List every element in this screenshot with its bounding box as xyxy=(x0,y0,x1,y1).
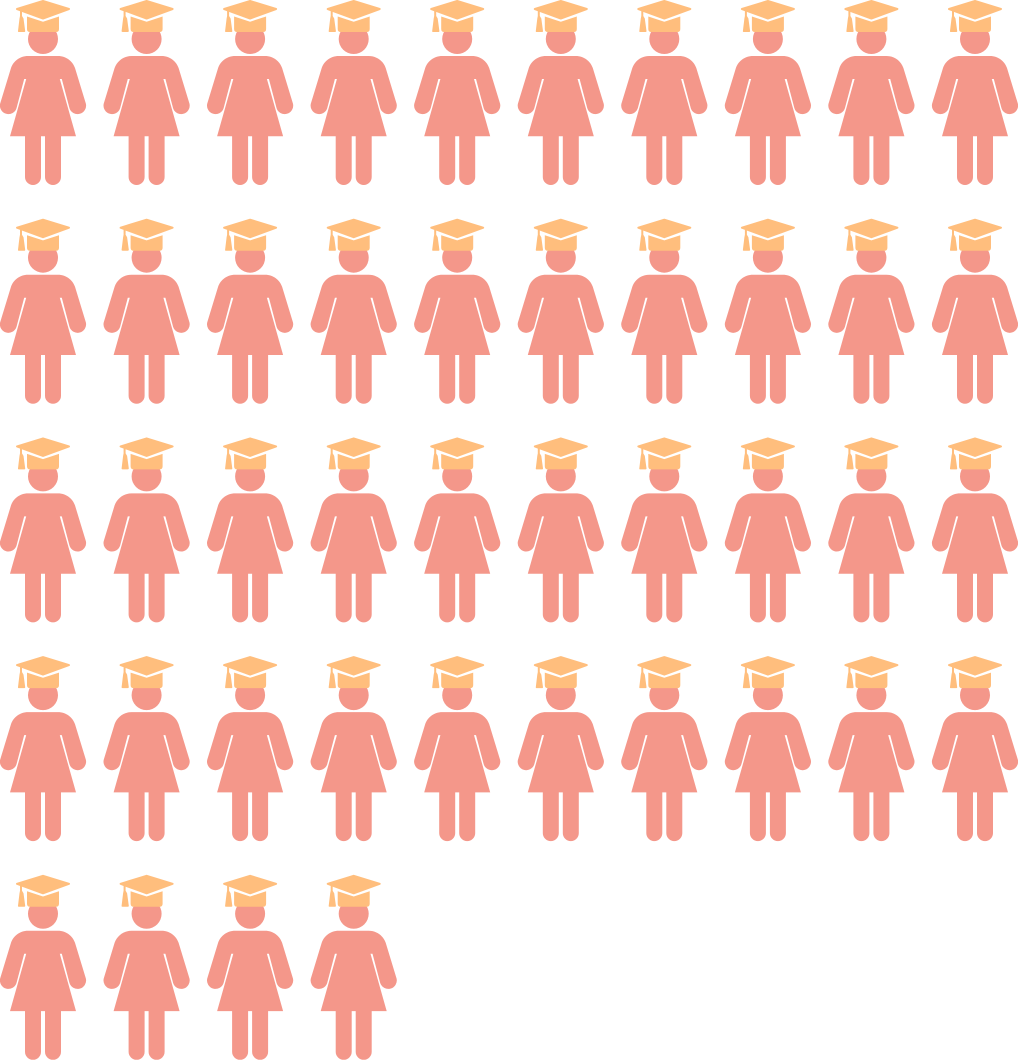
figure 42 xyxy=(104,876,190,1060)
figure 24 xyxy=(311,438,397,622)
figure 10 xyxy=(932,1,1018,185)
figure 25 xyxy=(414,438,500,622)
figure 6 xyxy=(518,1,604,185)
figure 11 xyxy=(0,220,86,404)
figure 22 xyxy=(104,438,190,622)
figure 15 xyxy=(414,220,500,404)
figure 1 xyxy=(0,1,86,185)
figure 31 xyxy=(0,657,86,841)
figure 16 xyxy=(518,220,604,404)
figure 14 xyxy=(311,220,397,404)
figure 37 xyxy=(621,657,707,841)
row 1 of figures xyxy=(0,1,1018,185)
figure 35 xyxy=(414,657,500,841)
figure 5 xyxy=(414,1,500,185)
figure 44 xyxy=(311,876,397,1060)
figure 36 xyxy=(518,657,604,841)
figure 43 xyxy=(207,876,293,1060)
figure 8 xyxy=(725,1,811,185)
figure 33 xyxy=(207,657,293,841)
figure 19 xyxy=(828,220,914,404)
figure 17 xyxy=(621,220,707,404)
figure 21 xyxy=(0,438,86,622)
figure 40 xyxy=(932,657,1018,841)
figure 12 xyxy=(104,220,190,404)
figure 3 xyxy=(207,1,293,185)
row 2 of figures xyxy=(0,220,1018,404)
figure 39 xyxy=(828,657,914,841)
figure 27 xyxy=(621,438,707,622)
row 5 of figures xyxy=(0,876,397,1060)
figure 23 xyxy=(207,438,293,622)
figure 18 xyxy=(725,220,811,404)
figure 2 xyxy=(104,1,190,185)
row 4 of figures xyxy=(0,657,1018,841)
figure 29 xyxy=(828,438,914,622)
figure 30 xyxy=(932,438,1018,622)
figure 28 xyxy=(725,438,811,622)
figure 32 xyxy=(104,657,190,841)
row 3 of figures xyxy=(0,438,1018,622)
figure 41 xyxy=(0,876,86,1060)
figure 38 xyxy=(725,657,811,841)
figure 13 xyxy=(207,220,293,404)
figure 20 xyxy=(932,220,1018,404)
figure 4 xyxy=(311,1,397,185)
figure 26 xyxy=(518,438,604,622)
figure 7 xyxy=(621,1,707,185)
figure 9 xyxy=(828,1,914,185)
figure 34 xyxy=(311,657,397,841)
